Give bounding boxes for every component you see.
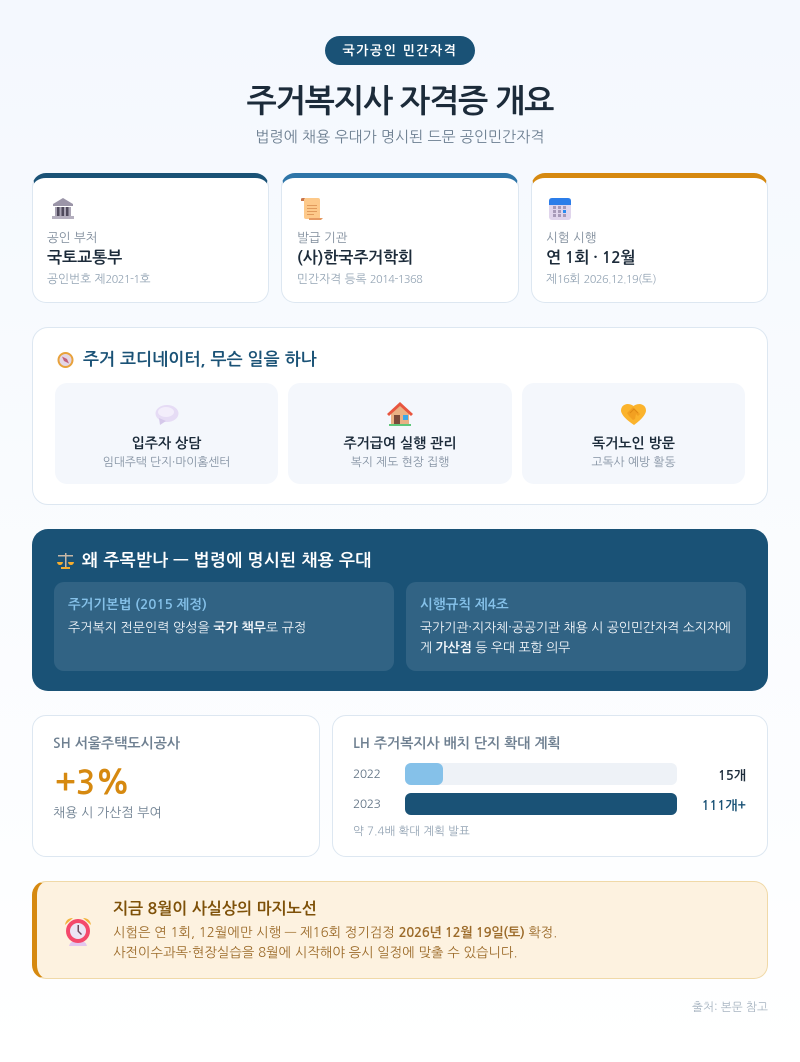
stat heading: SH 서울주택도시공사 [53, 737, 180, 751]
item note: 고독사 예방 활동 [591, 456, 676, 468]
chart heading: LH 주거복지사 배치 단지 확대 계획 [353, 737, 561, 751]
subtitle: 법령에 채용 우대가 명시된 드문 공인민간자격 [256, 130, 544, 145]
panel: exam schedule [531, 173, 768, 303]
icon: scales [57, 553, 74, 569]
note: 민간자격 등록 2014-1368 [297, 273, 422, 285]
label: 발급 기관 [297, 231, 348, 244]
bar 2022 [353, 763, 746, 785]
item: tenant counselling [55, 383, 278, 484]
bar track [405, 763, 677, 785]
bar fill [405, 763, 443, 785]
year label: 2023 [353, 798, 380, 810]
callout title: 지금 8월이 사실상의 마지노선 [113, 902, 317, 917]
icon: calendar [549, 198, 571, 220]
callout text: 시험은 연 1회, 12월에만 시행 — 제16회 정기검정 2026년 12월 19일(토) 확정. [113, 926, 557, 939]
chart note: 약 7.4배 확대 계획 발표 [353, 825, 470, 837]
card title: 주거기본법 (2015 제정) [68, 599, 207, 612]
item title: 독거노인 방문 [592, 437, 675, 451]
year label: 2022 [353, 768, 380, 780]
bar fill [405, 793, 677, 815]
icon: handshake [621, 404, 646, 425]
stat value: +3% [55, 767, 130, 799]
card text: 국가기관·지자체·공공기관 채용 시 공인민간자격 소지자에 [420, 621, 731, 634]
bar value: 15개 [718, 769, 746, 782]
stat note: 채용 시 가산점 부여 [53, 806, 162, 819]
badge [325, 36, 475, 65]
item note: 복지 제도 현장 집행 [351, 456, 449, 468]
panel: legal preference [32, 529, 768, 691]
section heading: 주거 코디네이터, 무슨 일을 하나 [83, 351, 317, 368]
card title: 시행규칙 제4조 [420, 599, 509, 612]
icon: scroll [301, 198, 323, 220]
bar value: 111개+ [702, 799, 746, 812]
section heading: 왜 주목받나 — 법령에 명시된 채용 우대 [82, 552, 372, 569]
card text: 주거복지 전문인력 양성을 국가 책무로 규정 [68, 621, 306, 634]
icon: alarm clock [65, 918, 91, 946]
callout: deadline [32, 881, 768, 979]
panel: issuing body [281, 173, 519, 303]
item title: 주거급여 실행 관리 [343, 437, 457, 451]
icon: speech bubble [156, 405, 178, 425]
item: elderly visits [522, 383, 745, 484]
source note: 출처: 본문 참고 [692, 1001, 768, 1013]
card: enforcement rule [406, 582, 746, 671]
icon: classical building [52, 198, 74, 219]
note: 공인번호 제2021-1호 [47, 273, 151, 285]
title: 주거복지사 자격증 개요 [247, 85, 553, 117]
callout text [113, 926, 557, 959]
card text: 게 가산점 등 우대 포함 의무 [420, 641, 570, 654]
bar 2023 [353, 793, 746, 815]
panel: SH stat [32, 715, 320, 857]
panel: LH chart [332, 715, 768, 857]
value: 국토교통부 [47, 251, 122, 266]
badge: 국가공인 민간자격 [343, 44, 457, 57]
value: (사)한국주거학회 [297, 251, 413, 266]
note: 제16회 2026.12.19(토) [546, 273, 656, 285]
item: housing benefit [288, 383, 512, 484]
item note: 임대주택 단지·마이홈센터 [103, 456, 230, 468]
value: 연 1회 · 12월 [546, 251, 635, 266]
label: 공인 부처 [47, 231, 98, 244]
panel: what coordinators do [32, 327, 768, 505]
item title: 입주자 상담 [132, 437, 201, 451]
icon: house [387, 402, 413, 426]
card: basic housing act [54, 582, 394, 671]
callout text: 사전이수과목·현장실습을 8월에 시작해야 응시 일정에 맞출 수 있습니다. [113, 946, 517, 959]
label: 시험 시행 [546, 231, 597, 244]
card text [420, 621, 731, 654]
panel: issuing ministry [32, 173, 269, 303]
icon: compass [58, 352, 74, 368]
